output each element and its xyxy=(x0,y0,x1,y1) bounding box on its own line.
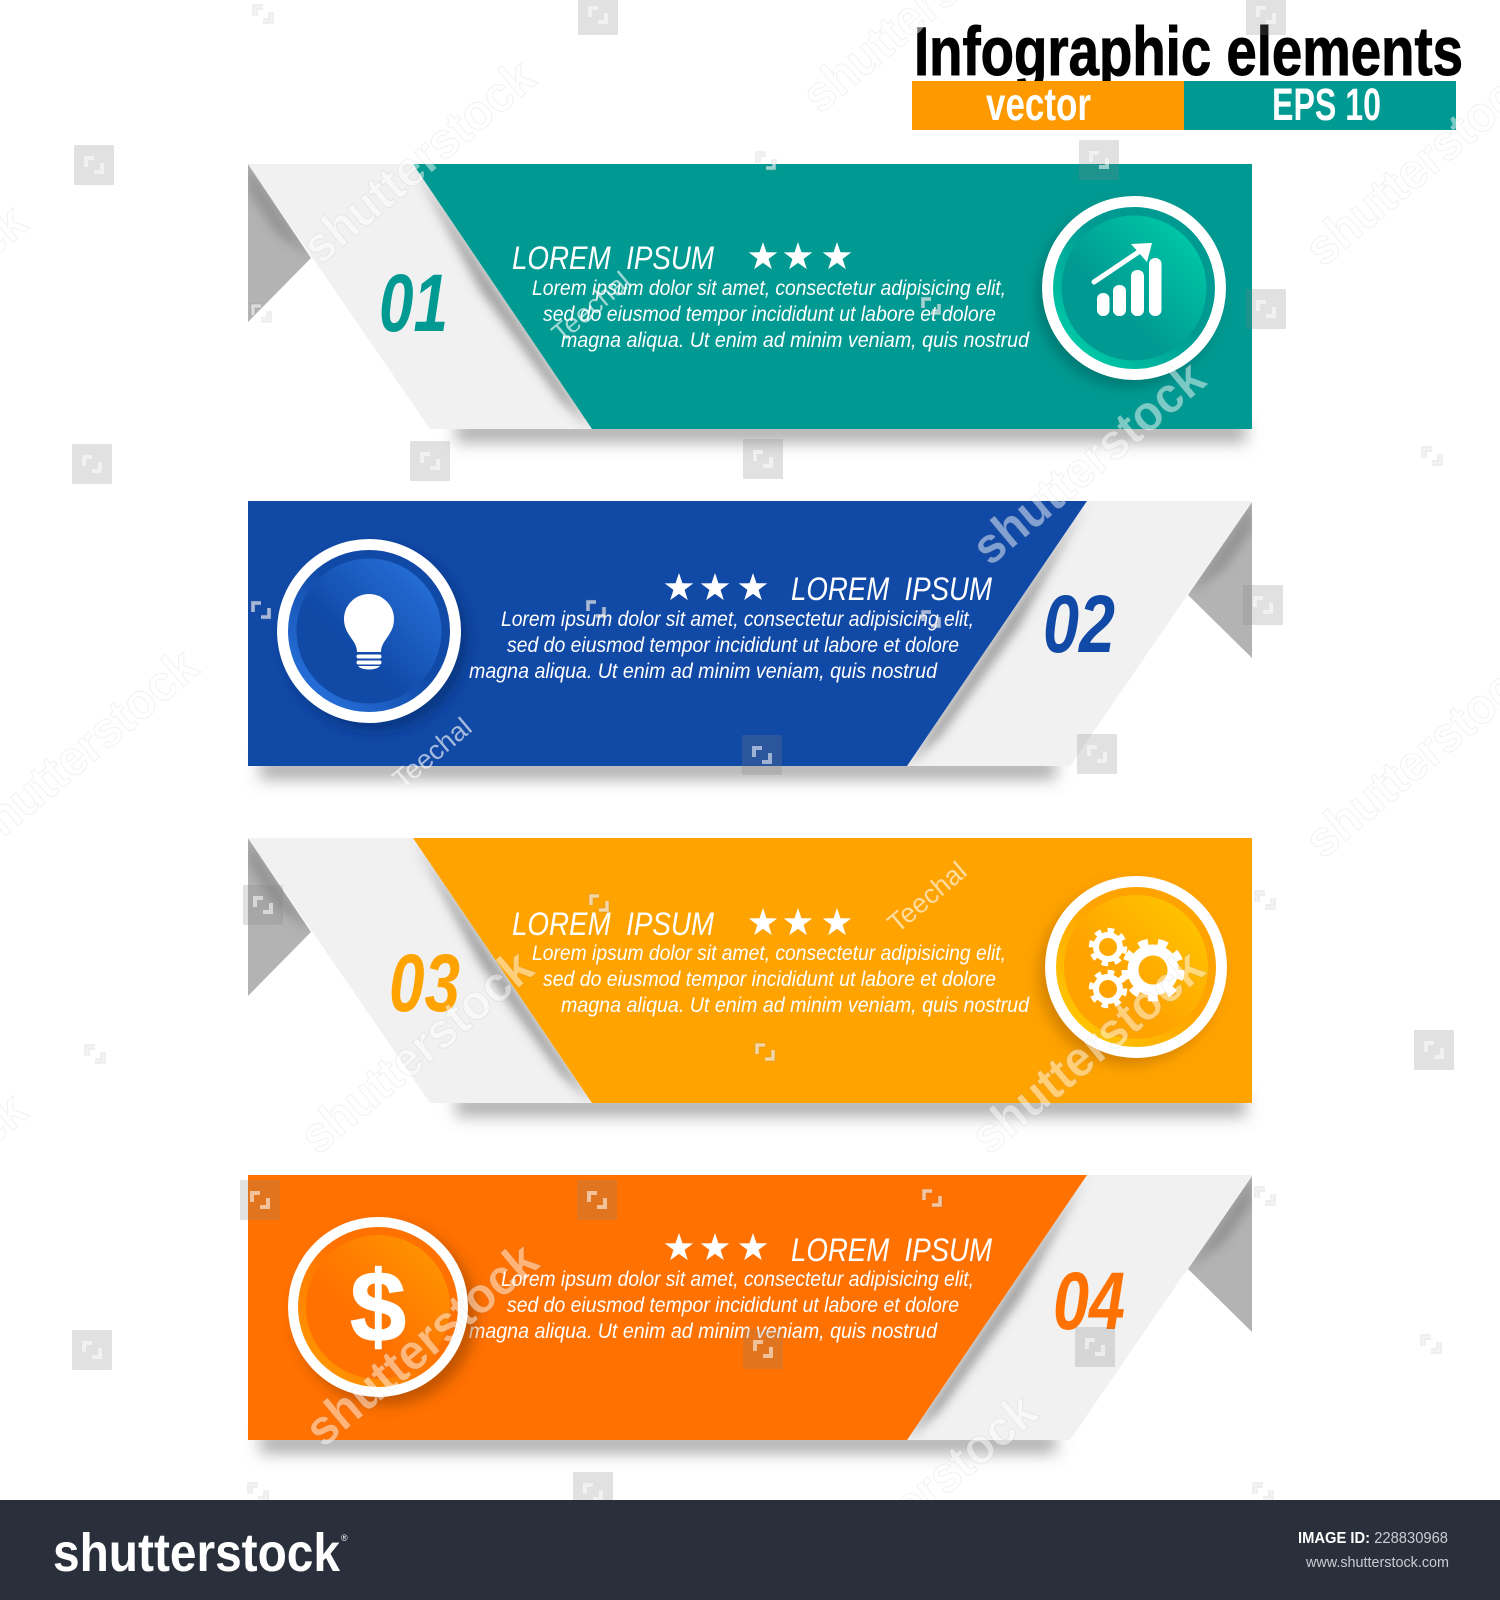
number 03: 03 xyxy=(389,938,460,1029)
watermarks: shutterstock xyxy=(294,1231,549,1457)
image id: IMAGE ID: 228830968 xyxy=(1298,1530,1448,1547)
stars 02 xyxy=(665,573,767,600)
body text 04: Lorem ipsum dolor sit amet, consectetur adipisicing elit, xyxy=(501,1268,974,1291)
body text 04: sed do eiusmod tempor incididunt ut labore et dolore xyxy=(507,1294,959,1317)
watermarks: shutterstock xyxy=(289,938,544,1164)
icon: gears badge xyxy=(1039,876,1227,1065)
number 04: 04 xyxy=(1053,1256,1125,1347)
watermarks: Teechal xyxy=(546,266,637,349)
icon: dollar badge xyxy=(288,1217,476,1405)
panel: banner 04 orange xyxy=(248,1175,1252,1453)
number 02: 02 xyxy=(1043,579,1115,670)
heading 01: LOREM IPSUM xyxy=(512,240,714,276)
subtitle bar: EPS 10: EPS 10 xyxy=(1272,79,1381,130)
stars 04 xyxy=(665,1233,767,1260)
body text 04 xyxy=(469,1268,974,1343)
watermarks: Teechal xyxy=(882,856,973,939)
ribbon 01 xyxy=(248,164,592,429)
stars 01 xyxy=(749,242,851,269)
heading 03: LOREM IPSUM xyxy=(512,906,714,942)
body text 04: magna aliqua. Ut enim ad minim veniam, quis nostrud xyxy=(469,1320,938,1343)
body text 02: sed do eiusmod tempor incididunt ut labore et dolore xyxy=(507,634,959,657)
watermarks: shutterstock xyxy=(961,349,1216,575)
icon: light bulb badge xyxy=(277,539,467,730)
body text 01: magna aliqua. Ut enim ad minim veniam, quis nostrud xyxy=(561,329,1030,352)
fold triangle 02 xyxy=(1188,502,1252,658)
number 01: 01 xyxy=(379,258,448,349)
footer bar xyxy=(0,1500,1500,1600)
footer logo: ® xyxy=(341,1533,348,1543)
watermarks: shutterstock xyxy=(291,48,546,274)
body text 01: sed do eiusmod tempor incididunt ut labore et dolore xyxy=(543,303,996,326)
fold triangle 04 xyxy=(1188,1176,1252,1332)
ribbon 03 xyxy=(248,838,592,1103)
fold triangle 03 xyxy=(248,838,311,996)
heading 04: LOREM IPSUM xyxy=(791,1232,992,1268)
panel: banner 01 teal xyxy=(248,164,1252,442)
heading 02: LOREM IPSUM xyxy=(791,571,992,607)
body text 01: Lorem ipsum dolor sit amet, consectetur adipisicing elit, xyxy=(532,277,1006,300)
watermarks: Teechal xyxy=(387,712,478,795)
body text 02: magna aliqua. Ut enim ad minim veniam, quis nostrud xyxy=(469,660,938,683)
body text 03: Lorem ipsum dolor sit amet, consectetur adipisicing elit, xyxy=(532,942,1006,965)
stars 03 xyxy=(749,908,851,935)
subtitle bar: EPS 10 xyxy=(1184,79,1456,130)
body text 03 xyxy=(532,942,1030,1017)
ribbon 04 xyxy=(907,1175,1252,1440)
title: Infographic elements xyxy=(912,13,1463,130)
panel: banner 02 blue xyxy=(248,501,1252,779)
subtitle bar: vector: vector xyxy=(986,78,1091,130)
icon: dollar badge: $ xyxy=(350,1251,406,1363)
subtitle bar: vector xyxy=(912,78,1184,130)
body text 02 xyxy=(469,608,974,683)
footer logo: shutterstock xyxy=(53,1523,341,1583)
ribbon 02 xyxy=(907,501,1252,766)
footer url: www.shutterstock.com xyxy=(1305,1554,1449,1571)
panel: banner 03 amber xyxy=(248,838,1252,1116)
watermarks: shutterstock xyxy=(960,938,1215,1164)
body text 01 xyxy=(532,277,1030,352)
body text 03: sed do eiusmod tempor incididunt ut labore et dolore xyxy=(543,968,996,991)
icon: growth chart badge xyxy=(1037,196,1226,387)
fold triangle 01 xyxy=(248,164,311,322)
body text 02: Lorem ipsum dolor sit amet, consectetur adipisicing elit, xyxy=(501,608,974,631)
body text 03: magna aliqua. Ut enim ad minim veniam, quis nostrud xyxy=(561,994,1030,1017)
